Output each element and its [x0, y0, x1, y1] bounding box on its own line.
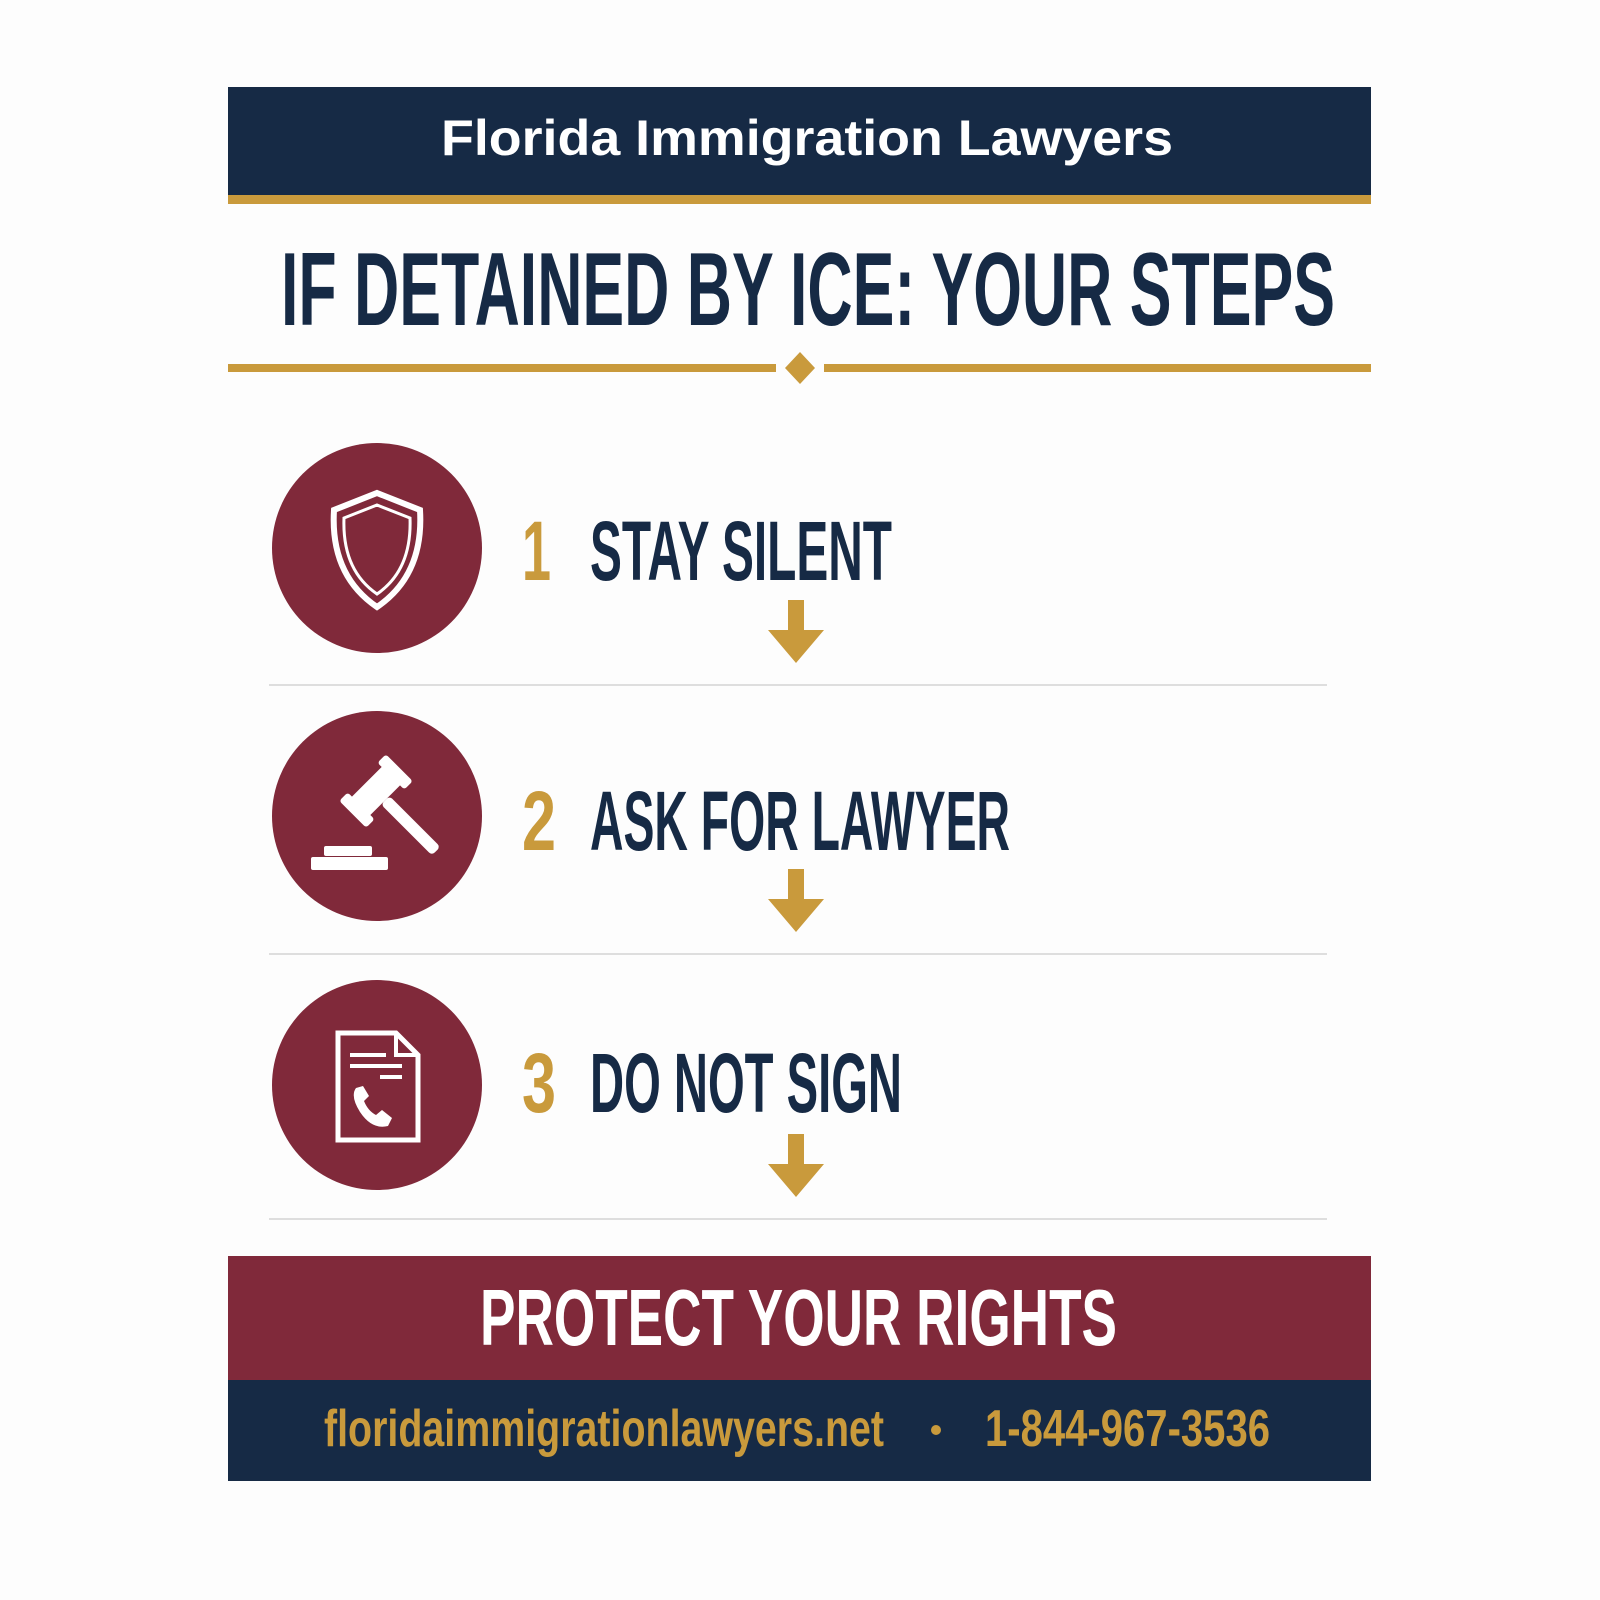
header banner: [228, 87, 1371, 204]
step 1: STAY SILENT: [590, 504, 892, 598]
step 3: DO NOT SIGN: [590, 1036, 902, 1130]
icon: gavel: [272, 711, 482, 921]
icon: shield: [272, 443, 482, 653]
footer contact bar: [228, 1380, 1371, 1481]
call-to-action banner: PROTECT YOUR RIGHTS: [480, 1273, 1117, 1362]
step 2: ASK FOR LAWYER: [590, 774, 1010, 868]
arrow: [768, 1134, 824, 1197]
arrow: [768, 869, 824, 932]
step 2: [272, 711, 1010, 932]
step 2: 2: [522, 774, 556, 868]
step 3: 3: [522, 1036, 556, 1130]
footer contact bar: 1-844-967-3536: [985, 1400, 1270, 1458]
call-to-action banner: [228, 1256, 1371, 1380]
step 1: 1: [522, 504, 551, 598]
title divider with diamond: [228, 352, 1371, 384]
arrow: [768, 600, 824, 663]
step 3: [272, 980, 902, 1197]
icon: document with phone: [272, 980, 482, 1190]
footer contact bar: floridaimmigrationlawyers.net: [324, 1400, 884, 1458]
step 1: [272, 443, 892, 663]
header banner: Florida Immigration Lawyers: [441, 110, 1173, 166]
